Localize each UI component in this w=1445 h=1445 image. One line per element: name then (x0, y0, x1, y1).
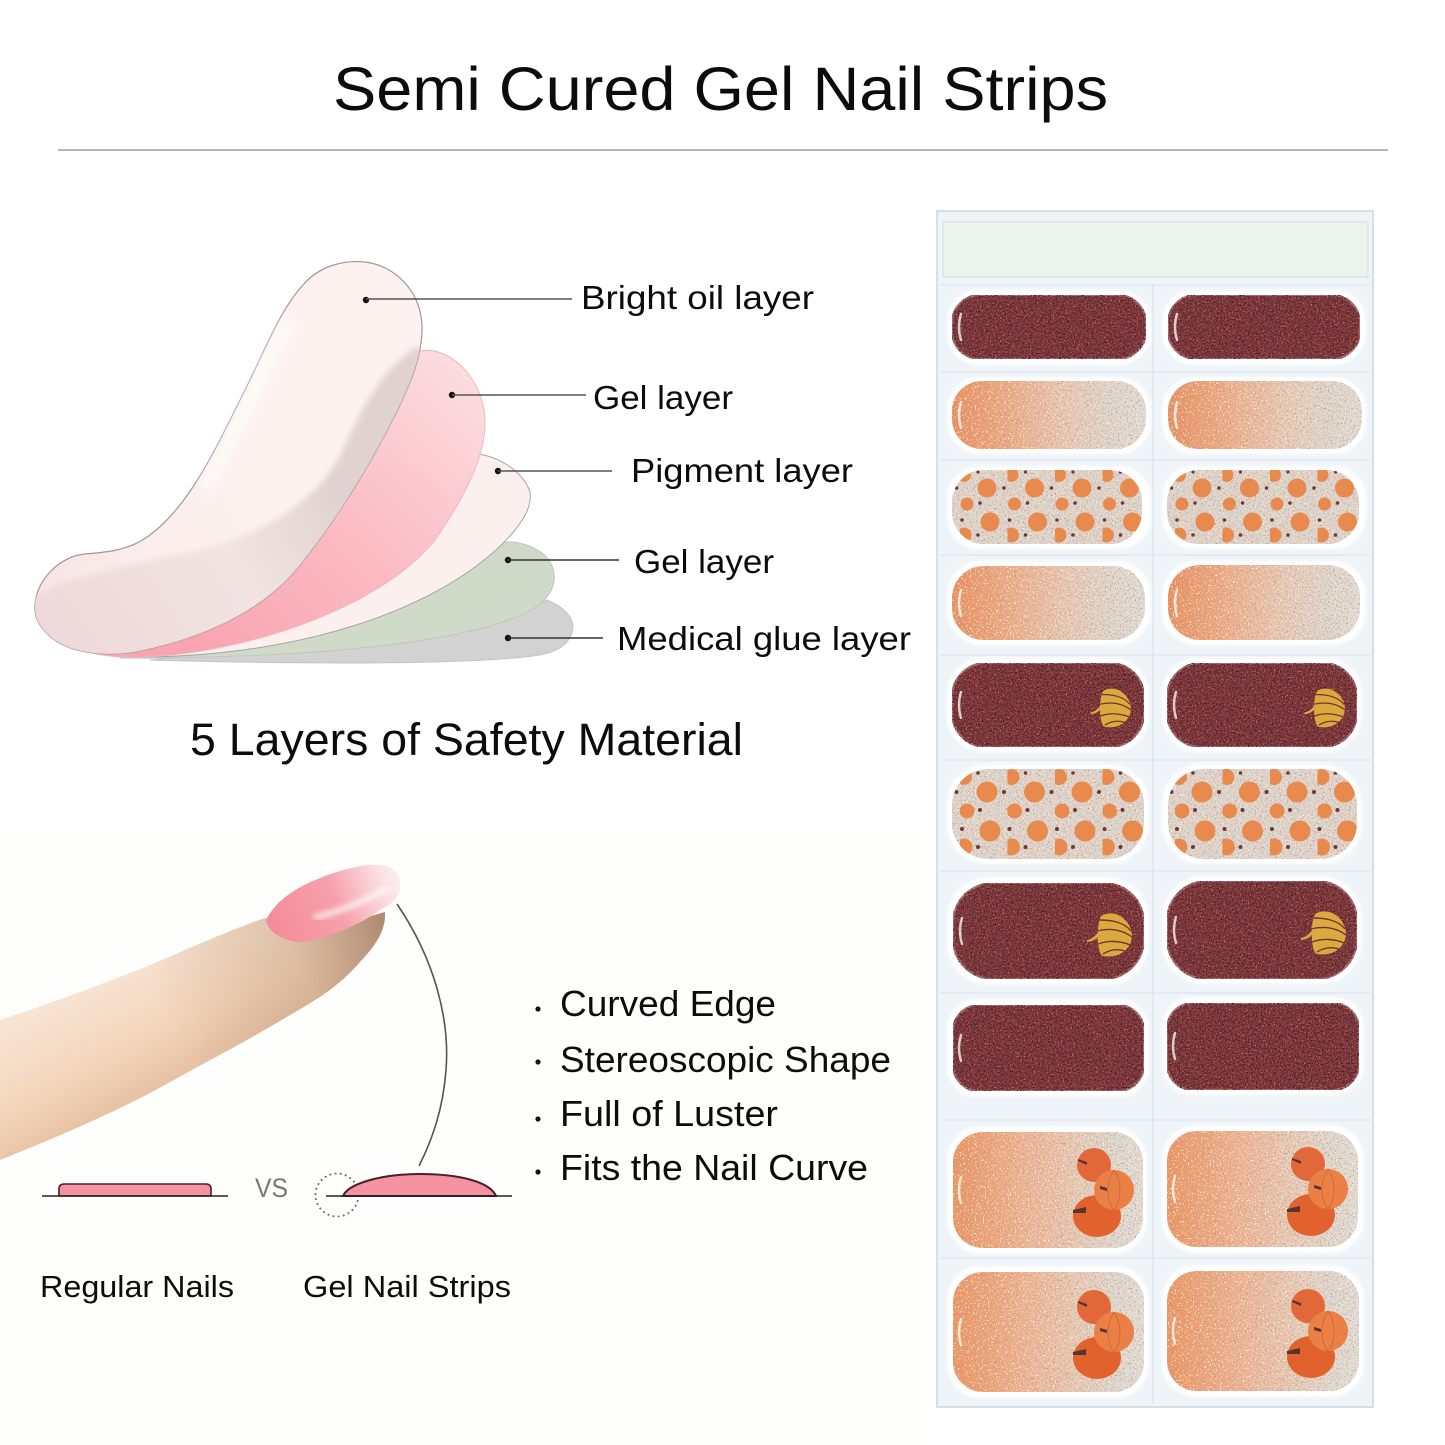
comparison: regular nail profile (40, 1184, 234, 1304)
heading: 5 layers: 5 Layers of Safety Material (190, 714, 743, 765)
nail row 9: ombre with pumpkins (953, 1131, 1358, 1248)
nail row 6: pumpkin polka (952, 769, 1357, 859)
finger (0, 912, 385, 1160)
layer shape: lower gel (120, 542, 554, 658)
faint lower-left background tint (0, 830, 925, 1445)
sheet backing (937, 211, 1373, 1407)
feature: curved edge: Curved Edge (560, 983, 776, 1024)
callout: medical glue layer (505, 620, 911, 657)
layer inner shading (34, 345, 420, 654)
finger tip shading (150, 912, 385, 1085)
callout: pigment layer (495, 452, 853, 489)
arrow: nail to cross-section (397, 904, 447, 1166)
label: gel nail strips: Gel Nail Strips (303, 1269, 511, 1304)
illustration: finger with gel nail (0, 865, 400, 1160)
panel: nail strip sheet (937, 211, 1373, 1407)
callout: lower gel layer (505, 543, 774, 580)
feature: full of luster: Full of Luster (560, 1093, 778, 1134)
nail (266, 865, 400, 942)
nail row 5: garnet with gold pumpkin (952, 663, 1357, 747)
panel: five layer diagram (30, 262, 573, 670)
callout: gel layer (449, 379, 733, 416)
nail row 4: orange ombre (952, 565, 1360, 640)
nail row 2: orange ombre (952, 381, 1362, 449)
nail halos (947, 290, 1366, 1398)
nail row 1: garnet glitter (952, 295, 1360, 359)
clear top tab (943, 222, 1368, 277)
vs label: VS (255, 1173, 288, 1203)
layer shape: bright oil (35, 262, 422, 654)
callout: gel layer: Gel layer (593, 379, 733, 416)
nail row 3: pumpkin polka (952, 470, 1359, 544)
layer highlight (205, 320, 290, 490)
nail row 7: garnet with gold pumpkin (953, 881, 1357, 979)
cell dividers (940, 285, 1370, 1405)
layer shape: pigment (70, 454, 530, 657)
callout: medical glue layer: Medical glue layer (617, 620, 911, 657)
layer shape: medical glue (150, 600, 573, 663)
callout: pigment layer: Pigment layer (631, 452, 853, 489)
feature: stereoscopic shape: Stereoscopic Shape (560, 1039, 891, 1080)
label: regular nails: Regular Nails (40, 1269, 234, 1304)
feature: fits the nail curve: Fits the Nail Curve (560, 1147, 868, 1188)
nail row 10: ombre with pumpkins (953, 1271, 1359, 1392)
feature list (535, 983, 891, 1188)
nail highlight (316, 888, 388, 917)
layer shape: upper gel (60, 350, 485, 657)
nail row 8: garnet glitter (953, 1003, 1359, 1091)
title: Semi Cured Gel Nail Strips (333, 55, 1108, 123)
comparison: gel strip profile (303, 1174, 512, 1304)
callout: bright oil layer (363, 279, 814, 316)
title rule (58, 149, 1388, 151)
callout: bright oil layer: Bright oil layer (581, 279, 814, 316)
callout: lower gel layer: Gel layer (634, 543, 774, 580)
